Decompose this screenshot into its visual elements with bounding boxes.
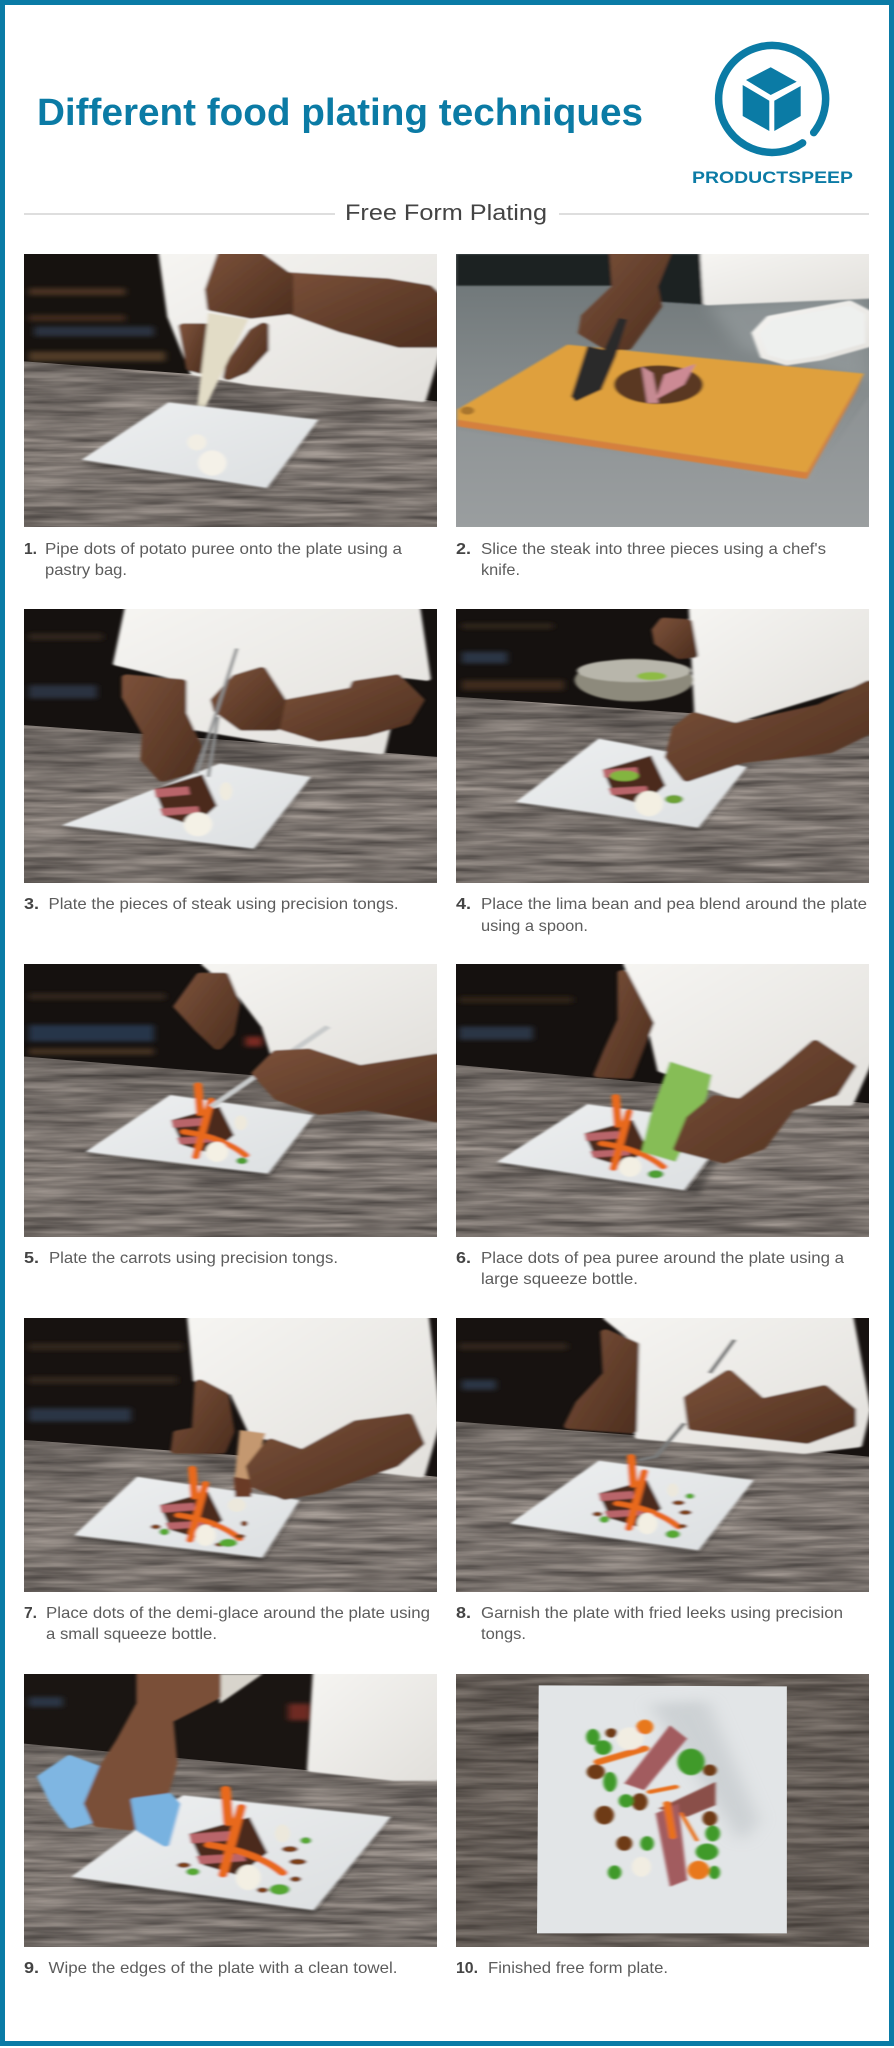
icon: cube [743,67,801,131]
caption 6: Place dots of pea puree around the plate using a [481,1250,844,1267]
caption 2: knife. [481,562,520,579]
caption 4: using a spoon. [481,918,588,935]
caption 8: tongs. [481,1626,526,1643]
caption 3: 3. [24,896,39,913]
photo 3: plating steak [24,609,437,883]
caption 7: a small squeeze bottle. [46,1626,217,1643]
caption 6: large squeeze bottle. [481,1271,638,1288]
caption 10: 10. [456,1960,478,1977]
caption 5: Plate the carrots using precision tongs. [49,1250,338,1267]
caption 9: 9. [24,1960,39,1977]
caption 1: Pipe dots of potato puree onto the plate using a [45,541,402,558]
caption 5: 5. [24,1250,39,1267]
caption 1 [24,541,402,579]
caption 7 [24,1605,430,1643]
caption 7: Place dots of the demi-glace around the plate using [46,1605,430,1622]
caption 6 [456,1250,844,1288]
section heading with rules: Free Form Plating [345,200,547,225]
photo 9: wiping plate with towel [24,1674,437,1947]
caption 8 [456,1605,843,1643]
caption 8: 8. [456,1605,471,1622]
caption 4 [456,896,867,935]
photo 5: plating carrots [24,964,437,1237]
photo 2: slicing steak [456,254,869,527]
photo 7: demi-glace squeeze bottle [24,1318,437,1592]
photo 6: pea puree squeeze bottle [456,964,869,1237]
caption 2 [456,541,826,579]
caption 2: Slice the steak into three pieces using a chef's [481,541,826,558]
photo 4: lima bean and pea blend [456,609,869,883]
caption 2: 2. [456,541,471,558]
caption 4: 4. [456,896,471,913]
logo: productspeep [692,45,853,187]
caption 4: Place the lima bean and pea blend around the plate [481,896,867,913]
caption 6: 6. [456,1250,471,1267]
photo 1: piping potato puree [24,254,437,527]
caption 1: 1. [24,541,37,558]
caption 3: Plate the pieces of steak using precision tongs. [48,896,398,913]
caption 8: Garnish the plate with fried leeks using precision [481,1605,843,1622]
photo 8: garnish with fried leeks [456,1318,869,1592]
photo 10: finished plate from above [456,1674,869,1947]
caption 9: Wipe the edges of the plate with a clean towel. [48,1960,398,1977]
caption 1: pastry bag. [45,562,127,579]
icon: ring [719,45,826,152]
logo wordmark: PRODUCTSPEEP [692,168,853,187]
title: Different food plating techniques [37,92,643,134]
caption 7: 7. [24,1605,37,1622]
caption 10: Finished free form plate. [488,1960,668,1977]
